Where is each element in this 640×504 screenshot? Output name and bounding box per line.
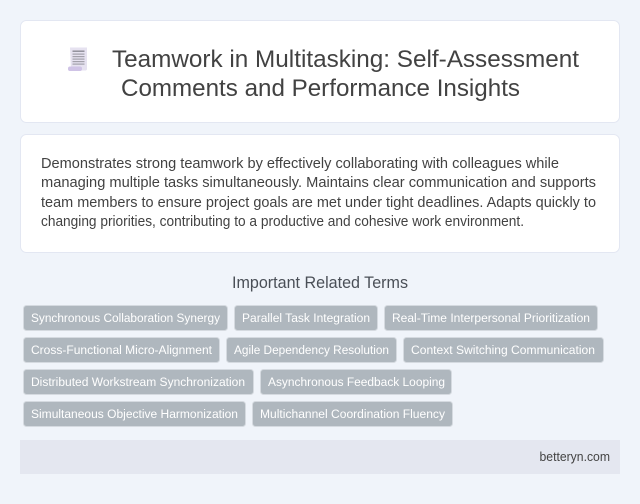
tag: Synchronous Collaboration Synergy — [31, 311, 221, 325]
text block: comment: team members to ensure project goals are met under tight deadlines. Adapts quickly to — [41, 195, 596, 211]
text block: comment: Demonstrates strong teamwork by effectively collaborating with colleagues while — [41, 156, 559, 172]
tag: Multichannel Coordination Fluency — [260, 407, 446, 421]
tag — [234, 306, 378, 330]
tag — [24, 306, 228, 330]
tag: Cross-Functional Micro-Alignment — [31, 343, 213, 357]
tag — [260, 370, 452, 394]
tag: Simultaneous Objective Harmonization — [31, 407, 238, 421]
panel: title card — [20, 20, 620, 122]
text block: comment: managing multiple tasks simultaneously. Maintains clear communication and supports — [41, 175, 596, 191]
tag — [404, 338, 604, 362]
tag: Context Switching Communication — [411, 343, 595, 357]
text block: comment — [41, 156, 596, 230]
footer: betteryn.com — [540, 450, 610, 464]
icon: document scroll — [68, 48, 87, 71]
tag: Asynchronous Feedback Looping — [268, 375, 445, 389]
tag — [384, 306, 598, 330]
panel: self-assessment comment — [20, 134, 620, 252]
tag — [252, 402, 452, 426]
tag: Parallel Task Integration — [242, 311, 370, 325]
footer — [20, 440, 620, 474]
title: Teamwork in Multitasking: Self-Assessment — [112, 46, 579, 73]
tag — [24, 370, 254, 394]
title: Comments and Performance Insights — [121, 75, 520, 102]
heading: related terms: Important Related Terms — [232, 274, 408, 292]
tag: Real-Time Interpersonal Prioritization — [392, 311, 590, 325]
tag — [226, 338, 396, 362]
tag — [24, 402, 246, 426]
tag: Agile Dependency Resolution — [234, 343, 389, 357]
title — [112, 46, 579, 102]
tag group: related terms — [24, 306, 604, 426]
tag — [24, 338, 220, 362]
text block: comment: changing priorities, contributing to a productive and cohesive work environment. — [41, 214, 524, 230]
tag: Distributed Workstream Synchronization — [31, 375, 245, 389]
